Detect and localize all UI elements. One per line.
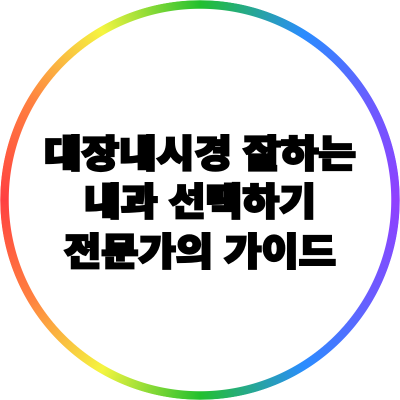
title line 3: 전문가의 가이드 [64, 231, 336, 273]
title line 1: 대장내시경 잘하는 [44, 133, 356, 175]
title line 2: 내과 선택하기 [84, 181, 316, 223]
